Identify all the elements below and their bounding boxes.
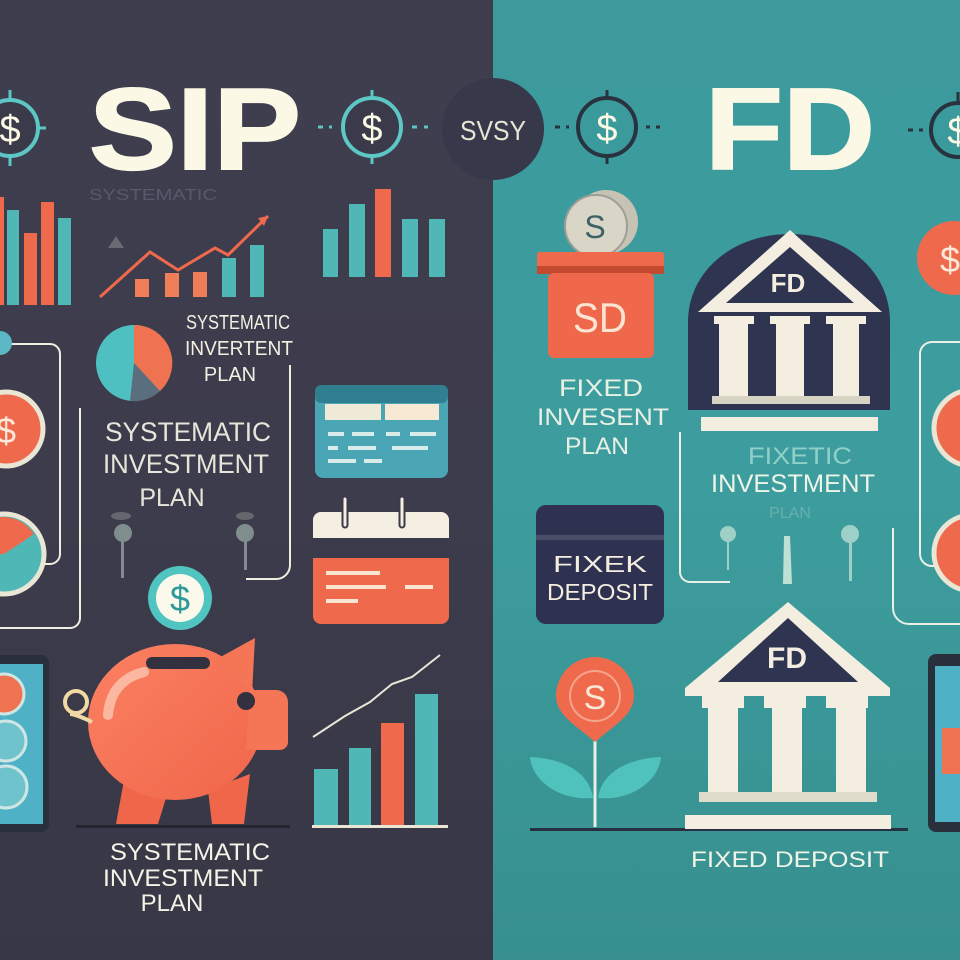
icon: dollar coin above piggy [148, 566, 212, 630]
heading: SIP: SIP [89, 64, 301, 194]
icon: money plant: S [584, 679, 606, 717]
icon: blue card [315, 385, 448, 478]
connector lines right [680, 342, 960, 624]
icon: coin right top: $ [940, 239, 960, 280]
icon: versus badge [442, 78, 544, 180]
icon: dollar coin centre-right: $ [596, 108, 618, 150]
text: systematic invertent plan: PLAN [204, 364, 256, 386]
icon: coin right middle [934, 390, 960, 466]
icon: bank lower: FD [767, 642, 807, 675]
icon: bank lower [685, 602, 891, 829]
icon: coin right top [917, 221, 960, 295]
text: fixetic investment: PLAN [769, 505, 811, 522]
icon: dollar coin above piggy: $ [170, 578, 190, 619]
text: fixetic investment: FIXETIC [748, 443, 852, 470]
icon: calendar [313, 499, 449, 624]
text: systematic investment plan middle [103, 417, 271, 512]
text: fixetic investment: INVESTMENT [711, 470, 875, 498]
icon: coin gauge left [0, 392, 43, 466]
text: systematic investment plan middle: PLAN [139, 484, 205, 512]
icon: money plant [530, 657, 661, 827]
text: systematic invertent plan [185, 312, 293, 386]
text: systematic investment plan lower: SYSTEMATIC [110, 839, 270, 866]
text: systematic investment plan lower [103, 839, 270, 917]
text: fixed deposit: FIXED DEPOSIT [691, 847, 889, 872]
icon: piggy bank [65, 638, 288, 824]
text: systematic investment plan middle: INVESTMENT [103, 449, 269, 479]
icon: bank upper [688, 230, 890, 431]
icon: blue tag left [0, 331, 12, 355]
text: fixed invesent plan: INVESENT [537, 404, 669, 431]
baseline under piggy [76, 825, 290, 828]
text: faded systematic: SYSTEMATIC [89, 187, 217, 204]
icon: fixek deposit card: FIXEK [553, 551, 648, 577]
icon: faded pins right [720, 525, 859, 584]
icon: phone left [0, 655, 49, 832]
text: systematic invertent plan: SYSTEMATIC [186, 312, 290, 334]
chart: pie [96, 325, 172, 401]
icon: fixek deposit card: DEPOSIT [547, 579, 653, 605]
text: fixetic investment [711, 443, 875, 522]
text: systematic invertent plan: INVERTENT [185, 338, 293, 360]
baseline under plant and bank [530, 828, 908, 831]
icon: pie gauge right [934, 515, 960, 591]
text: fixed invesent plan: PLAN [565, 433, 629, 460]
icon: dollar coin centre-left: $ [361, 108, 383, 150]
heading: FD: FD [705, 64, 875, 194]
chart: left edge bars [0, 197, 71, 305]
icon: versus badge: SVSY [460, 115, 526, 146]
connector lines left [0, 344, 290, 628]
icon: bank upper: FD [771, 268, 805, 298]
chart: line and bars [100, 216, 268, 297]
icon: dollar coin right edge [908, 92, 960, 157]
icon: SD box [537, 252, 664, 358]
icon: pie gauge left [0, 514, 44, 594]
icon: coin in slot [565, 190, 638, 257]
icon: dollar coin centre-left [318, 90, 428, 164]
text: fixed invesent plan: FIXED [559, 375, 643, 402]
icon: coin in slot: S [584, 209, 606, 245]
icon: dollar coin left edge [0, 90, 46, 166]
text: systematic investment plan lower: PLAN [141, 890, 203, 917]
icon: fixek deposit card [536, 505, 664, 624]
icon: faded pins [111, 512, 254, 578]
panel: SIP background [0, 0, 493, 960]
chart: lower right growth bars [312, 655, 448, 828]
text: systematic investment plan middle: SYSTEMATIC [105, 417, 271, 447]
panel: FD background [493, 0, 960, 960]
icon: SD box: SD [573, 294, 627, 341]
text: fixed invesent plan [537, 375, 669, 460]
icon: phone right [928, 654, 960, 832]
text: systematic investment plan lower: INVESTMENT [103, 865, 263, 892]
chart: upper right bars [323, 189, 445, 277]
icon: dollar coin left edge: $ [0, 109, 21, 151]
icon: dollar coin centre-right [555, 90, 660, 164]
